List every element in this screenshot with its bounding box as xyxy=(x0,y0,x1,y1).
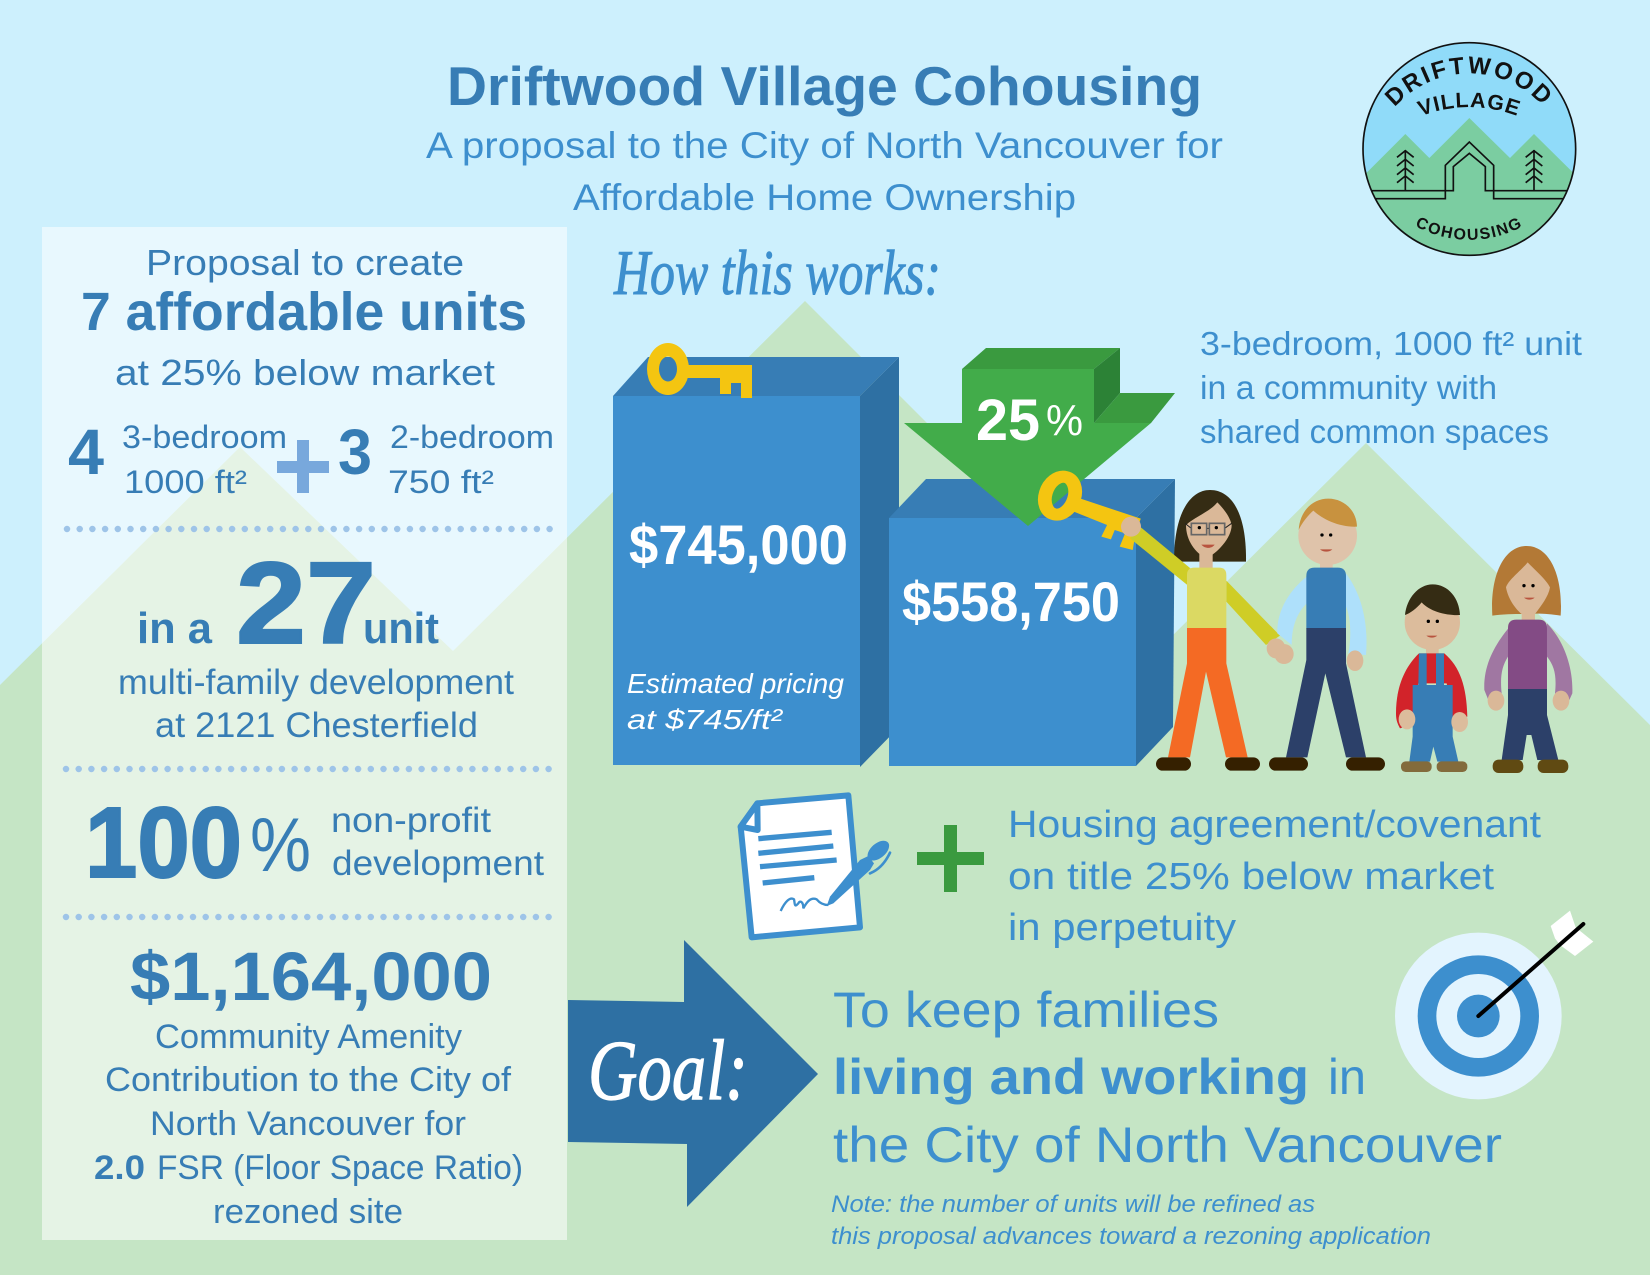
stat: 100 percent non-profit: 100 xyxy=(85,787,242,899)
heading: how this works: How this works: xyxy=(613,237,941,308)
arrow: 25 percent down: 25 xyxy=(976,388,1040,453)
price: market: $745,000 xyxy=(629,513,848,576)
note: estimated pricing: Estimated pricing xyxy=(627,668,844,699)
icon: key on market block xyxy=(647,343,752,398)
text: goal statement xyxy=(833,982,1502,1173)
background mountains xyxy=(0,301,1650,1275)
person: man xyxy=(1269,499,1385,771)
person: woman with key xyxy=(1121,490,1285,771)
person: boy xyxy=(1396,584,1468,772)
affordable price block xyxy=(889,479,1175,766)
note: units will be refined: this proposal advances toward a rezoning application xyxy=(831,1223,1431,1250)
stat: 3 two-bedroom units: 3 xyxy=(338,416,372,488)
subtitle: Affordable Home Ownership xyxy=(573,177,1076,218)
market price block xyxy=(613,343,899,767)
price: affordable: $558,750 xyxy=(902,570,1120,633)
text: multi-family development: multi-family development xyxy=(118,663,514,702)
panel: proposal summary xyxy=(42,227,567,1240)
icon: plus xyxy=(277,440,329,493)
title: Driftwood Village Cohousing xyxy=(447,55,1202,117)
stat: 4 three-bedroom units xyxy=(68,416,287,500)
arrow: goal: Goal: xyxy=(588,1022,748,1118)
logo: Driftwood Village Cohousing: VILLAGE xyxy=(1416,92,1520,116)
arrow: 25 percent down: % xyxy=(1046,396,1083,445)
text: 3-bedroom description xyxy=(1200,325,1582,450)
stat: community amenity contribution: Contribution to the City of xyxy=(105,1061,512,1099)
stat: 3 two-bedroom units xyxy=(338,416,554,500)
stat: 100 percent non-profit xyxy=(85,787,544,899)
note: estimated pricing xyxy=(627,668,844,735)
arrow: goal xyxy=(568,940,818,1207)
logo: Driftwood Village Cohousing: DRIFTWOOD xyxy=(1384,56,1550,106)
icon: key in hand xyxy=(1040,474,1141,550)
person: girl xyxy=(1484,546,1572,773)
stat: 100 percent non-profit: % xyxy=(250,803,311,888)
text: housing agreement: on title 25% below market xyxy=(1008,856,1494,898)
note: estimated pricing: at $745/ft² xyxy=(627,704,784,735)
text: 3-bedroom description: in a community with xyxy=(1200,369,1497,406)
icon: signed document xyxy=(741,795,893,937)
text: goal statement: in xyxy=(1328,1049,1366,1105)
heading: 7 affordable units: 7 affordable units xyxy=(81,282,527,342)
text: goal statement: the City of North Vancouver xyxy=(833,1117,1502,1173)
stat: community amenity contribution xyxy=(94,938,523,1231)
note: units will be refined xyxy=(831,1191,1431,1250)
text: goal statement: To keep families xyxy=(833,982,1219,1038)
stat: 100 percent non-profit: non-profit xyxy=(331,801,491,840)
stat: community amenity contribution: North Vancouver for xyxy=(150,1105,466,1143)
text: address: at 2121 Chesterfield xyxy=(155,706,478,745)
stat: community amenity contribution: FSR (Floor Space Ratio) xyxy=(157,1149,523,1187)
stat: 3 two-bedroom units: 750 ft² xyxy=(388,464,494,500)
stat: in a 27 unit: in a xyxy=(137,604,213,653)
logo: Driftwood Village Cohousing: COHOUSING xyxy=(1417,218,1521,240)
text: 3-bedroom description: shared common spaces xyxy=(1200,413,1549,450)
text: housing agreement: Housing agreement/covenant xyxy=(1008,804,1541,846)
stat: community amenity contribution: Community Amenity xyxy=(155,1018,462,1056)
stat: community amenity contribution: $1,164,000 xyxy=(130,938,492,1015)
stat: community amenity contribution: rezoned site xyxy=(213,1193,403,1231)
heading: proposal to create: Proposal to create xyxy=(146,242,464,283)
text: housing agreement: in perpetuity xyxy=(1008,907,1236,949)
text: at 25% below market: at 25% below market xyxy=(115,352,495,393)
stat: 3 two-bedroom units: 2-bedroom xyxy=(390,419,554,455)
family illustration xyxy=(1121,490,1572,773)
stat: 4 three-bedroom units: 3-bedroom xyxy=(122,419,287,455)
stat: in a 27 unit xyxy=(137,538,439,668)
text: 3-bedroom description: 3-bedroom, 1000 ft² unit xyxy=(1200,325,1582,362)
subtitle: A proposal to the City of North Vancouver for xyxy=(426,125,1223,166)
stat: 4 three-bedroom units: 1000 ft² xyxy=(124,464,247,500)
text: housing agreement xyxy=(1008,804,1541,949)
stat: in a 27 unit: 27 xyxy=(236,538,376,668)
logo: Driftwood Village Cohousing xyxy=(1362,42,1576,256)
text: goal statement: living and working xyxy=(833,1049,1309,1105)
icon: target with arrow xyxy=(1395,911,1593,1099)
subtitle xyxy=(426,125,1223,218)
icon: green plus sign xyxy=(917,825,984,892)
note: units will be refined: Note: the number of units will be refined as xyxy=(831,1191,1315,1218)
stat: 100 percent non-profit: development xyxy=(332,844,544,883)
stat: in a 27 unit: unit xyxy=(363,604,439,653)
arrow: 25 percent down xyxy=(904,348,1175,526)
stat: 4 three-bedroom units: 4 xyxy=(68,416,104,488)
stat: community amenity contribution: 2.0 xyxy=(94,1149,145,1187)
